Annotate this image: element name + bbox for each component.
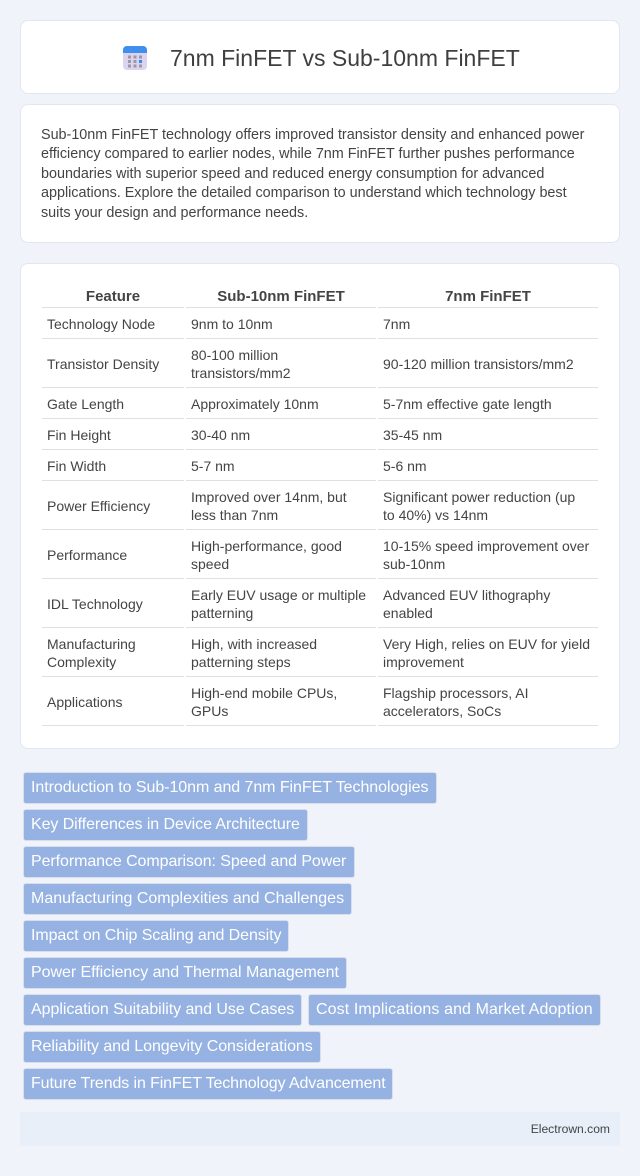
tag list: related topics: Future Trends in FinFET Technology Advancement (31, 1075, 386, 1092)
tag list: related topics: Power Efficiency and Thermal Management (31, 964, 339, 981)
panel: comparison table: Significant power reduction (up (383, 489, 575, 505)
panel: comparison table: Power Efficiency (47, 498, 150, 514)
panel: comparison table: 9nm to 10nm (191, 316, 273, 332)
panel: comparison table: High-performance, good (191, 538, 342, 554)
panel: comparison table: Flagship processors, AI (383, 685, 529, 701)
panel: comparison table: to 40%) vs 14nm (383, 507, 488, 523)
panel: comparison table: Technology Node (47, 316, 155, 332)
panel: comparison table (20, 263, 620, 749)
panel: comparison table: patterning (191, 605, 253, 621)
panel: comparison table: 7nm (383, 316, 410, 332)
panel: comparison table: improvement (383, 654, 464, 670)
panel: comparison table: 90-120 million transistors/mm2 (383, 356, 574, 372)
tag list: related topics: Key Differences in Device Architecture (31, 816, 300, 833)
footer: Electrown.com (531, 1122, 610, 1136)
panel: comparison table: Applications (47, 694, 122, 710)
panel: comparison table: sub-10nm (383, 556, 445, 572)
intro text: efficiency compared to earlier nodes, while 7nm FinFET further pushes performance (41, 146, 575, 162)
panel: comparison table: Fin Height (47, 427, 111, 443)
intro text: Sub-10nm FinFET technology offers improved transistor density and enhanced power (41, 126, 584, 142)
panel: comparison table: 30-40 nm (191, 427, 250, 443)
panel: comparison table: Fin Width (47, 458, 106, 474)
panel: comparison table: Early EUV usage or multiple (191, 587, 366, 603)
intro text (41, 126, 584, 220)
tag list: related topics: Cost Implications and Market Adoption (316, 1001, 593, 1018)
intro text: applications. Explore the detailed comparison to understand which technology best (41, 185, 567, 201)
panel: comparison table: enabled (383, 605, 433, 621)
tag list: related topics: Introduction to Sub-10nm and 7nm FinFET Technologies (31, 779, 428, 796)
icon: calendar (123, 46, 147, 70)
panel: comparison table: patterning steps (191, 654, 291, 670)
panel: comparison table: Very High, relies on EUV for yield (383, 636, 590, 652)
panel: comparison table: Feature (86, 288, 140, 305)
panel: comparison table: Transistor Density (47, 356, 159, 372)
panel: comparison table: 7nm FinFET (445, 288, 531, 305)
panel: comparison table: 35-45 nm (383, 427, 442, 443)
panel: comparison table: Sub-10nm FinFET (217, 288, 345, 305)
panel: intro card (20, 104, 620, 243)
panel: comparison table: High, with increased (191, 636, 317, 652)
panel: comparison table: 80-100 million (191, 347, 278, 363)
panel: comparison table: 5-7 nm (191, 458, 235, 474)
panel: comparison table: Performance (47, 547, 127, 563)
tag list: related topics: Application Suitability and Use Cases (31, 1001, 294, 1018)
panel: comparison table: less than 7nm (191, 507, 278, 523)
tag list: related topics (23, 772, 601, 1100)
panel: comparison table: High-end mobile CPUs, (191, 685, 337, 701)
panel: comparison table: IDL Technology (47, 596, 143, 612)
panel: comparison table: 5-7nm effective gate length (383, 396, 552, 412)
panel: comparison table: Manufacturing (47, 636, 136, 652)
panel: comparison table: Approximately 10nm (191, 396, 319, 412)
footer (20, 1112, 620, 1146)
panel: comparison table: Gate Length (47, 396, 124, 412)
title: 7nm FinFET vs Sub-10nm FinFET (170, 45, 520, 71)
panel: comparison table: Advanced EUV lithography (383, 587, 550, 603)
intro text: boundaries with superior speed and reduced energy consumption for advanced (41, 166, 544, 182)
tag list: related topics: Impact on Chip Scaling and Density (31, 927, 281, 944)
panel: comparison table: Complexity (47, 654, 116, 670)
panel: comparison table: 10-15% speed improvement over (383, 538, 589, 554)
panel: comparison table: Improved over 14nm, but (191, 489, 347, 505)
panel: title card (20, 20, 620, 94)
tag list: related topics: Manufacturing Complexities and Challenges (31, 890, 344, 907)
tag list: related topics: Performance Comparison: Speed and Power (31, 853, 346, 870)
panel: comparison table: GPUs (191, 703, 228, 719)
panel: comparison table: transistors/mm2 (191, 365, 291, 381)
panel: comparison table: accelerators, SoCs (383, 703, 501, 719)
panel: comparison table: speed (191, 556, 229, 572)
tag list: related topics: Reliability and Longevity Considerations (31, 1038, 313, 1055)
intro text: suits your design and performance needs. (41, 204, 308, 220)
panel: comparison table: 5-6 nm (383, 458, 427, 474)
